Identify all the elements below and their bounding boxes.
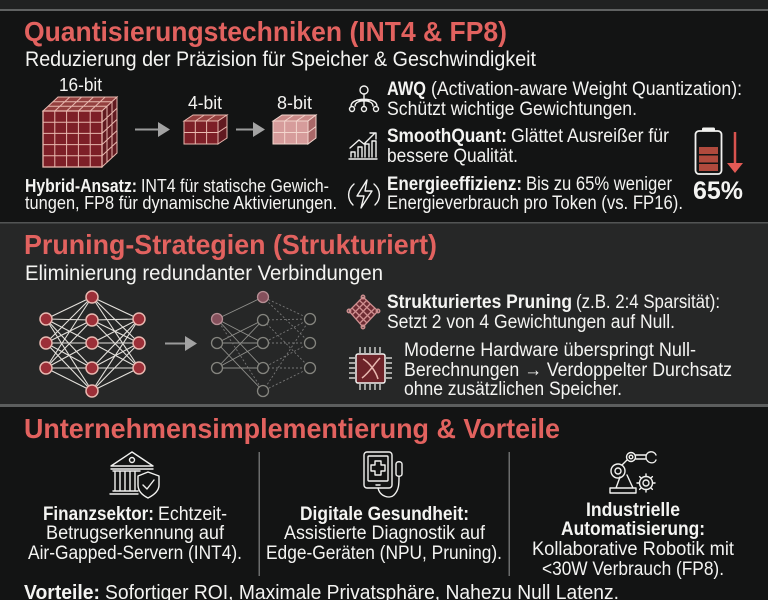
text: Hybrid-Ansatz: INT4 für statische Gewich- bbox=[141, 176, 329, 196]
subtitle: Reduzierung der Präzision: Reduzierung der Präzision für Speicher & Geschwindigkeit bbox=[25, 48, 536, 71]
icon: growth chart bbox=[349, 133, 377, 159]
text: Strukturiertes Pruning bbox=[387, 292, 720, 333]
text: SmoothQuant: bessere Qualität. bbox=[387, 146, 518, 167]
icon: medical tablet bbox=[364, 452, 402, 497]
text: Digitale Gesundheit: Edge-Geräten (NPU, Pruning). bbox=[266, 543, 502, 564]
text: Moderne Hardware bbox=[404, 340, 732, 400]
text: Moderne Hardware: ohne zusätzlichen Speicher. bbox=[404, 379, 622, 400]
text: Strukturiertes Pruning: Strukturiertes Pruning bbox=[387, 292, 572, 313]
arrow: pruning bbox=[165, 336, 197, 351]
icon: battery with down arrow bbox=[696, 128, 743, 174]
text: Hybrid-Ansatz: tungen, FP8 für dynamische Aktivierungen. bbox=[25, 193, 337, 213]
text: Finanzsektor: Finanzsektor: bbox=[43, 504, 154, 525]
text: Digitale Gesundheit: Assistierte Diagnostik auf bbox=[284, 523, 486, 544]
arrow: 16-bit to 4-bit bbox=[135, 122, 170, 137]
text: Industrielle Automatisierung: Industrielle bbox=[586, 500, 680, 521]
heading: Quantisierungstechniken: Quantisierungstechniken (INT4 & FP8) bbox=[24, 16, 507, 47]
icon: 16-bit cube bbox=[43, 97, 117, 167]
text: Moderne Hardware: Moderne Hardware überspringt Null- bbox=[404, 340, 696, 361]
text: Energieeffizienz: Bis zu 65% weniger bbox=[526, 174, 673, 195]
icon: robot arm with gear bbox=[610, 452, 656, 493]
icon: processor chip bbox=[349, 347, 392, 390]
label: 16-bit: 16-bit bbox=[59, 74, 102, 95]
panel: Unternehmensimplementierung bbox=[24, 413, 735, 600]
text: Industrielle Automatisierung bbox=[532, 500, 735, 580]
text: Strukturiertes Pruning: (z.B. 2:4 Sparsität): bbox=[576, 292, 720, 313]
chart: full neural network bbox=[40, 291, 145, 397]
panel: Pruning-Strategien bbox=[24, 229, 732, 400]
text: AWQ: (Activation-aware Weight Quantization): bbox=[431, 79, 742, 100]
icon: structured pruning lattice bbox=[347, 295, 380, 329]
text: Industrielle Automatisierung: Kollaborative Robotik mit bbox=[532, 539, 735, 560]
text: Finanzsektor: Betrugserkennung auf bbox=[46, 523, 225, 544]
icon: energy bolt bbox=[349, 180, 379, 208]
label: 8-bit: 8-bit bbox=[277, 92, 312, 113]
icon: bank with shield bbox=[110, 452, 159, 498]
text: Finanzsektor: Echtzeit- bbox=[158, 504, 227, 525]
text: Finanzsektor bbox=[28, 504, 242, 564]
text: Energieeffizienz bbox=[387, 174, 683, 214]
text: SmoothQuant: SmoothQuant: bbox=[387, 126, 507, 147]
text: Industrielle Automatisierung: Automatisierung: bbox=[561, 519, 705, 540]
text: Digitale Gesundheit: Digitale Gesundheit: bbox=[300, 504, 469, 525]
heading: Unternehmensimplementierung: Unternehmensimplementierung & Vorteile bbox=[24, 413, 560, 444]
text: AWQ: AWQ bbox=[387, 79, 426, 100]
subtitle: Eliminierung: Eliminierung redundanter Verbindungen bbox=[25, 262, 383, 285]
icon: AWQ hierarchy bbox=[350, 86, 378, 112]
text: Hybrid-Ansatz bbox=[25, 176, 337, 213]
text: Moderne Hardware: Berechnungen → Verdoppelter Durchsatz bbox=[404, 360, 732, 381]
text: Energieeffizienz: Energieverbrauch pro Token (vs. FP16). bbox=[387, 193, 683, 214]
chart: pruned neural network bbox=[212, 292, 316, 396]
icon: 8-bit cube bbox=[273, 115, 316, 144]
label: 4-bit: 4-bit bbox=[188, 92, 222, 113]
text: SmoothQuant bbox=[387, 126, 670, 167]
text: Hybrid-Ansatz: Hybrid-Ansatz: bbox=[25, 176, 137, 196]
panel: Quantisierungstechniken bbox=[24, 16, 743, 214]
text: Industrielle Automatisierung: <30W Verbrauch (FP8). bbox=[542, 559, 724, 580]
text: Energieeffizienz: Energieeffizienz: bbox=[387, 174, 522, 195]
heading: Pruning-Strategien: Pruning-Strategien (Strukturiert) bbox=[24, 229, 437, 260]
stat: 65%: 65% bbox=[693, 177, 743, 205]
text: AWQ bbox=[387, 79, 742, 120]
text: SmoothQuant: Glättet Ausreißer für bbox=[511, 126, 670, 147]
icon: 4-bit cube bbox=[184, 115, 227, 144]
text: Digitale Gesundheit bbox=[266, 504, 502, 564]
text: Strukturiertes Pruning: Setzt 2 von 4 Gewichtungen auf Null. bbox=[387, 312, 675, 333]
text: Finanzsektor: Air-Gapped-Servern (INT4). bbox=[28, 543, 242, 564]
arrow: 4-bit to 8-bit bbox=[236, 122, 265, 137]
text: AWQ: Schützt wichtige Gewichtungen. bbox=[387, 99, 637, 120]
